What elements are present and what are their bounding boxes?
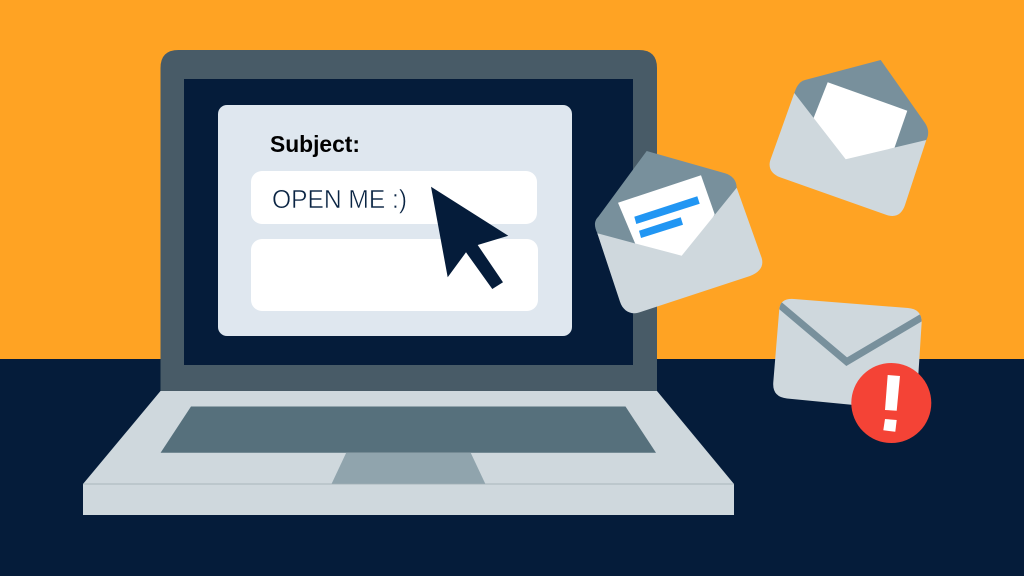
base edge line <box>83 483 734 485</box>
subject label: Subject: <box>270 131 360 157</box>
envelope flap <box>794 60 928 170</box>
icon: mouse cursor arrow <box>431 187 508 289</box>
envelope pocket <box>770 93 926 216</box>
background: orange wall <box>0 0 1024 359</box>
laptop base top <box>83 391 734 484</box>
letter line long <box>634 196 700 224</box>
envelope body <box>773 299 922 410</box>
trackpad <box>332 453 485 484</box>
envelope fold line <box>779 304 924 362</box>
envelope flap <box>595 151 738 270</box>
letter <box>812 82 907 168</box>
envelope: closed with alert <box>773 299 931 443</box>
letter <box>618 175 715 260</box>
laptop <box>83 50 734 515</box>
panel background <box>218 105 572 336</box>
exclamation bar <box>885 375 900 411</box>
laptop screen <box>184 79 633 365</box>
subject field <box>251 171 537 224</box>
keyboard <box>161 406 656 453</box>
email window panel <box>218 105 572 336</box>
exclamation dot <box>883 419 897 432</box>
subject text: OPEN ME :) <box>272 186 407 214</box>
envelope: open with blank letter <box>770 60 928 216</box>
message field <box>251 239 538 311</box>
background: navy desk <box>0 359 1024 576</box>
laptop lid <box>160 50 657 391</box>
alert badge <box>851 363 931 443</box>
laptop base front <box>83 484 734 515</box>
envelope pocket <box>597 188 762 313</box>
letter line short <box>639 217 683 238</box>
envelope: open with blue lines <box>595 151 762 313</box>
